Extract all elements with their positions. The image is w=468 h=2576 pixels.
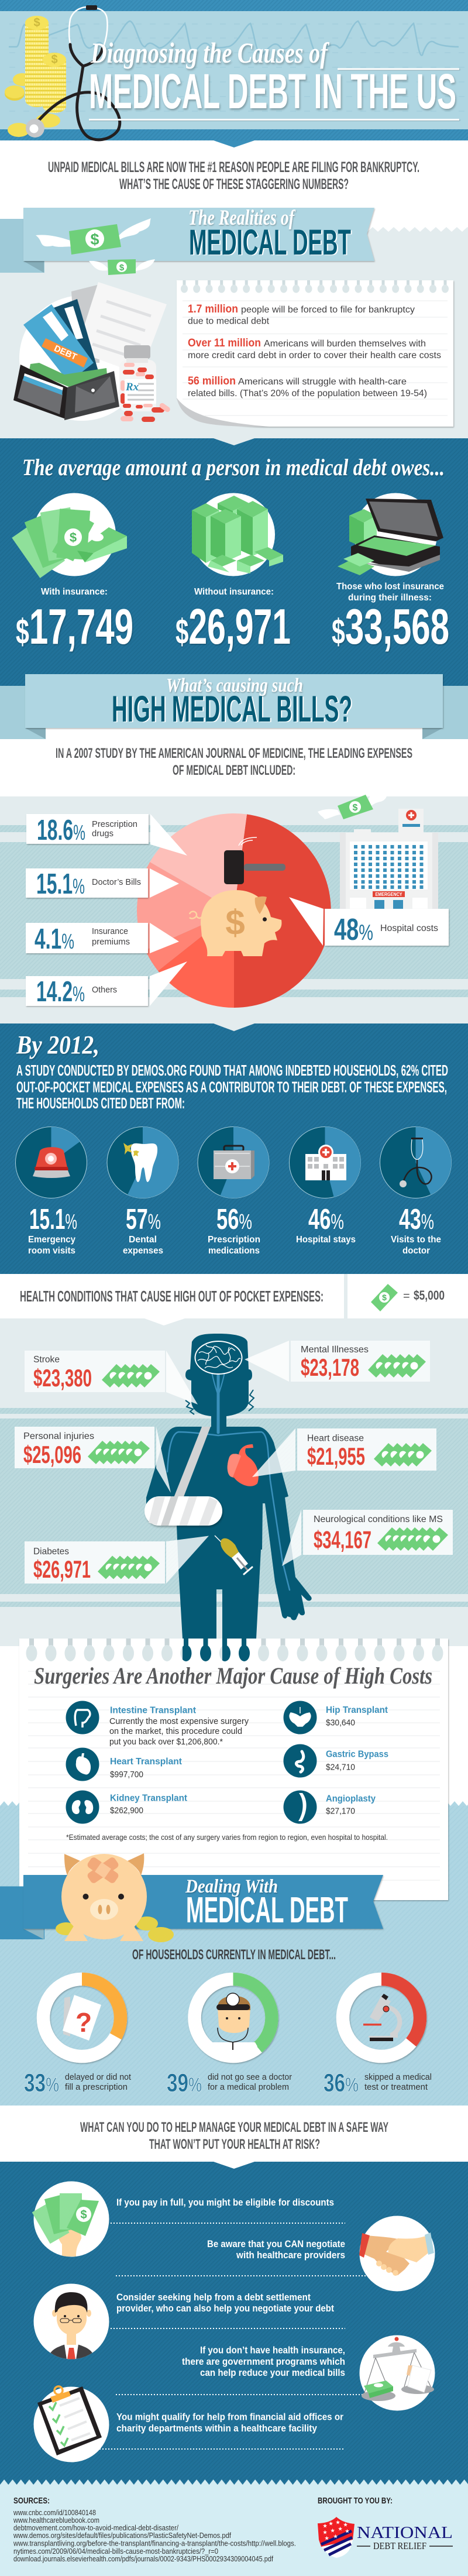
ribbon: dealing with medical debt: MEDICAL DEBT: [186, 1890, 348, 1931]
card: hospital costs: Hospital costs: [380, 923, 438, 933]
logo: national debt relief: [318, 2517, 453, 2558]
callout: diabetes: [25, 1536, 209, 1584]
tip icon: cash in hand: $: [80, 2209, 87, 2221]
ribbon: realities heading: MEDICAL DEBT: [190, 223, 352, 263]
donut: delayed prescription 33%: [24, 1979, 132, 2097]
surgery: angioplasty: [283, 1791, 376, 1823]
panel: tips: [0, 2162, 468, 2485]
donut: skipped doctor 39%: for a medical problem: [208, 2082, 289, 2092]
arm sling and cast: [144, 1427, 222, 1526]
study paragraph: THE HOUSEHOLDS CITED DEBT FROM:: [16, 1094, 185, 1112]
loose pills: [121, 402, 171, 422]
surgery: intestine transplant: put you back over $1,206,800.*: [109, 1737, 223, 1747]
donut values: 15.1%: [29, 1204, 77, 1235]
logo: national debt relief: ★: [343, 2522, 348, 2527]
callout: diabetes: $26,971: [33, 1555, 91, 1583]
panel: leading expenses background: [0, 796, 468, 1023]
card: others: 14.2%: [36, 976, 85, 1008]
tip icon: clipboard: [34, 2386, 109, 2462]
blood vessels: [167, 1372, 290, 1590]
without insurance: [192, 493, 283, 576]
logo: national debt relief: ★: [325, 2536, 329, 2541]
callout: heart disease: Heart disease: [307, 1434, 364, 1443]
ribbon: dealing with medical debt: [0, 1853, 383, 1942]
donut labels: expenses: [123, 1246, 163, 1256]
tip text: charity departments within a healthcare facility: [116, 2423, 318, 2434]
coin stacks: [5, 16, 66, 137]
ribbon: realities heading: MEDICAL DEBT: [189, 222, 351, 262]
card: others: Others: [92, 985, 117, 995]
lost insurance briefcase: [338, 493, 443, 576]
surgery: intestine transplant: [66, 1701, 249, 1747]
donut: delayed prescription 33%: ?: [75, 2007, 92, 2038]
ribbon: realities heading: [0, 206, 374, 275]
heading band: health conditions: $5,000: [414, 1288, 445, 1303]
fact: health-care bills: related bills. (That’s 20% of the population between 19-54): [188, 389, 427, 399]
money chain: [88, 1441, 150, 1464]
panel: average debt owed: With insurance:: [41, 587, 108, 597]
tip text: If you don’t have health insurance,: [200, 2345, 345, 2356]
with insurance: $: [70, 530, 77, 545]
donut: skipped test 36%: [324, 1979, 432, 2097]
callout: neurological conditions: $34,167: [314, 1526, 371, 1553]
donut: emergency room visits: [15, 1127, 87, 1198]
footnote: *Estimated average costs; the cost of any surgery varies from region to region, even hospital to hospital.: [66, 1833, 388, 1842]
stress marks: [185, 1390, 254, 1414]
surgery: angioplasty: $27,170: [326, 1806, 355, 1816]
illustration: wallet with debt cards and pills: [13, 282, 171, 422]
intro text: [48, 159, 419, 193]
ribbon: dealing with medical debt: Dealing With: [185, 1876, 278, 1897]
card: others: [26, 961, 187, 1008]
donut values: [29, 1204, 434, 1235]
surgery: gastric bypass: $24,710: [326, 1763, 355, 1772]
surgery: kidney transplant: $262,900: [110, 1806, 143, 1815]
tip text: [182, 2345, 345, 2378]
tip icon: handshake: [359, 2216, 435, 2292]
card: insurance premiums: 4.1%: [35, 923, 74, 955]
sources list: www.cnbc.com/id/100840148: [13, 2509, 96, 2517]
fact: credit card debt: [188, 337, 441, 360]
flying money small: $: [119, 263, 125, 273]
pill bottle: [119, 345, 156, 411]
fact: bankruptcy: due to medical debt: [188, 316, 270, 327]
surgery: intestine transplant: Currently the most expensive surgery: [109, 1717, 249, 1726]
callout: heart disease: $21,955: [307, 1442, 365, 1470]
fact: bankruptcy: 1.7 million: [188, 303, 238, 315]
panel: average debt owed: during their illness:: [348, 593, 432, 603]
flying money large: [36, 218, 151, 255]
callout: stroke: Stroke: [33, 1355, 60, 1365]
coin stacks: $: [51, 53, 58, 66]
donut labels: Prescription: [208, 1235, 260, 1245]
fact: credit card debt: more credit card debt in order to cover their health care costs: [188, 351, 441, 360]
panel: average debt owed: [0, 438, 468, 686]
study intro text: [56, 746, 412, 778]
money chain: [98, 1555, 160, 1579]
card: prescription drugs: 18.6%: [37, 815, 85, 846]
pill bottle: Rx: [125, 381, 139, 393]
surgery: intestine transplant: on the market, this procedure could: [109, 1727, 242, 1736]
card: prescription drugs: drugs: [92, 829, 113, 839]
donut values: 57%: [126, 1204, 161, 1235]
callout: mental illnesses: [245, 1341, 430, 1382]
logo: national debt relief: ★: [336, 2520, 340, 2525]
legend: money icon: $: [382, 1293, 387, 1302]
logo: national debt relief: NATIONAL: [357, 2524, 453, 2542]
fact: health-care bills: 56 million: [188, 375, 236, 387]
card: hospital costs: [289, 897, 449, 947]
donut values: 56%: [216, 1204, 252, 1235]
donut: visits to the doctor: [380, 1127, 452, 1198]
surgery: hip transplant: $30,640: [326, 1718, 355, 1727]
tip text: [116, 2292, 334, 2314]
sources list: [13, 2496, 296, 2563]
donut: delayed prescription 33%: delayed or did not: [65, 2072, 132, 2082]
tip text: with healthcare providers: [236, 2250, 345, 2261]
footer background: [0, 2479, 468, 2576]
piggy with bandage and coins: [56, 1853, 174, 1942]
sources list: download.journals.elsevierhealth.com/pdfs/journals/0002-9343/PHS0002934309004045.pdf: [13, 2555, 273, 2563]
heading band: health conditions: [0, 1274, 468, 1325]
brain: [195, 1341, 242, 1374]
ribbon: realities heading: The Realities of: [188, 206, 296, 230]
card: prescription drugs: [26, 814, 187, 856]
donut values: 46%: [308, 1204, 344, 1235]
tip text: [207, 2239, 345, 2261]
card: insurance premiums: Insurance: [92, 926, 128, 936]
donut: delayed prescription 33%: fill a prescription: [65, 2082, 128, 2092]
card: doctor's bills: Doctor’s Bills: [92, 877, 141, 887]
callout: mental illnesses: $23,178: [301, 1354, 359, 1381]
fact: bankruptcy: [188, 303, 415, 327]
illustration: wallet with debt cards and pills: DEBT: [53, 344, 78, 362]
card: hospital costs: 48%: [334, 913, 373, 947]
tip text: there are government programs which: [182, 2357, 345, 2367]
heading band: health conditions: =: [403, 1290, 410, 1303]
panel: by 2012 study: [0, 1023, 468, 1274]
tip text: Consider seeking help from a debt settlement: [116, 2292, 311, 2303]
panel: average debt owed: $26,971: [176, 599, 291, 655]
donut: skipped doctor 39%: did not go see a doctor: [208, 2072, 292, 2082]
panel: notepaper facts: [177, 280, 453, 427]
money chain: [377, 1527, 448, 1551]
syringe: [215, 1536, 252, 1574]
donut labels: doctor: [402, 1246, 430, 1256]
donut: skipped test 36%: test or treatment: [364, 2082, 428, 2092]
card: insurance premiums: premiums: [92, 937, 130, 947]
heading: what can you do: [80, 2120, 388, 2152]
bandage: [86, 1856, 120, 1884]
donut labels: Dental: [129, 1235, 157, 1245]
flying money: expenses: [318, 787, 388, 819]
donut labels: Hospital stays: [296, 1235, 356, 1245]
donut labels: [28, 1235, 441, 1256]
legs through paper holes: [183, 1639, 250, 1661]
money chain: [374, 1443, 432, 1466]
fact: health-care bills: Americans will struggle with health-care: [238, 377, 407, 387]
tip text: Be aware that you CAN negotiate: [207, 2239, 345, 2249]
surgery: kidney transplant: [66, 1791, 188, 1823]
study paragraph: [16, 1062, 448, 1112]
tip icon: scales: [359, 2335, 435, 2411]
donut labels: room visits: [28, 1246, 75, 1256]
logo: national debt relief: DEBT RELIEF: [373, 2540, 426, 2551]
sources list: debtmovement.com/how-to-avoid-medical-debt-disaster/: [13, 2524, 178, 2532]
panel: by 2012 study: By 2012,: [16, 1031, 99, 1059]
donut: skipped doctor 39%: [167, 1979, 292, 2097]
donut: hospital stays: [289, 1126, 361, 1198]
sources list: SOURCES:: [13, 2496, 50, 2506]
sources list: www.transplantliving.org/before-the-transplant/financing-a-transplant/the-costs/http://well.blogs.: [13, 2540, 296, 2548]
logo: national debt relief: ★: [333, 2534, 338, 2539]
panel: average debt owed: Those who lost insurance: [336, 582, 444, 592]
callout: neurological conditions: Neurological conditions like MS: [314, 1514, 443, 1524]
tip text: provider, who can also help you negotiate your debt: [116, 2303, 334, 2314]
donut labels: Visits to the: [391, 1235, 441, 1245]
panel: surgeries notepaper: [19, 1639, 448, 1900]
pie chart: expenses: [137, 813, 331, 1008]
ribbon: high medical bills heading: [0, 674, 468, 739]
donut labels: Emergency: [28, 1235, 75, 1245]
flying money large: $: [90, 231, 99, 248]
logo: national debt relief: ★: [329, 2521, 333, 2526]
tip text: can help reduce your medical bills: [200, 2368, 345, 2378]
money chain: [368, 1354, 426, 1378]
card: prescription drugs: Prescription: [92, 819, 137, 829]
callout: neurological conditions: [282, 1510, 453, 1566]
flying money small: [89, 259, 155, 275]
logo: national debt relief: ★: [338, 2526, 343, 2532]
brought to you by: BROUGHT TO YOU BY:: [318, 2496, 393, 2506]
header banner: [0, 0, 468, 147]
surgery: hip transplant: Hip Transplant: [326, 1705, 388, 1715]
callout: personal injuries: $25,096: [23, 1441, 81, 1468]
fact: credit card debt: Americans will burden themselves with: [264, 339, 426, 349]
tip icon: settlement provider: [34, 2283, 109, 2359]
tip icon: cash in hand: [32, 2182, 109, 2256]
callout: heart disease: [252, 1428, 436, 1477]
logo: national debt relief: ★: [323, 2530, 328, 2535]
surgery: heart transplant: $997,700: [110, 1770, 143, 1780]
card: doctor's bills: 15.1%: [36, 868, 85, 900]
heading: what can you do: THAT WON’T PUT YOUR HEALTH AT RISK?: [149, 2137, 320, 2152]
card: doctor's bills: [26, 868, 179, 900]
sources list: nytimes.com/2009/06/04/medical-bills-cause-most-bankruptcies/?_r=0: [13, 2547, 218, 2556]
surgery: kidney transplant: Kidney Transplant: [110, 1793, 188, 1804]
panel: health conditions background: [0, 1318, 468, 1646]
coin stacks: $: [33, 16, 40, 29]
panel: realities background: [0, 227, 468, 438]
hammer: [224, 837, 285, 884]
panel: average debt owed: $17,749: [16, 599, 133, 655]
surgery: angioplasty: Angioplasty: [326, 1794, 376, 1804]
surgery: heart transplant: Heart Transplant: [110, 1757, 183, 1767]
heart: [228, 1444, 259, 1486]
logo: national debt relief: ★: [331, 2528, 335, 2533]
piggy bank: $: [225, 903, 245, 942]
title: [89, 36, 459, 121]
sources list: www.demos.org/sites/default/files/publications/PlasticSafetyNet-Demos.pdf: [13, 2532, 231, 2540]
callout: diabetes: Diabetes: [33, 1547, 69, 1557]
title: Diagnosing the Causes of: [90, 36, 329, 69]
sources list: www.healthcarebluebook.com: [13, 2516, 99, 2525]
ECG line: [9, 21, 459, 56]
legend: money icon: [371, 1284, 398, 1311]
card: insurance premiums: [26, 923, 179, 955]
study intro text: OF MEDICAL DEBT INCLUDED:: [173, 763, 295, 778]
panel: average debt owed: Without insurance:: [194, 587, 274, 597]
callout: personal injuries: Personal injuries: [23, 1431, 94, 1441]
donut: skipped doctor 39%: 39%: [167, 2069, 202, 2097]
piggy bank: [190, 890, 281, 956]
icon: hospital building: [340, 809, 438, 911]
stethoscope: [26, 5, 120, 140]
donut values: 43%: [399, 1204, 434, 1235]
body figure: [144, 1334, 312, 1639]
money chain: [102, 1364, 160, 1387]
logo: national debt relief: ★: [345, 2529, 350, 2534]
donut labels: medications: [208, 1246, 260, 1256]
flying money: expenses: $: [353, 803, 358, 813]
donut: delayed prescription 33%: 33%: [24, 2069, 59, 2097]
callout: personal injuries: [15, 1427, 171, 1493]
with insurance: [12, 493, 127, 578]
icon: hospital building: EMERGENCY: [376, 892, 402, 897]
callout: stroke: $23,380: [33, 1364, 92, 1392]
surgery: intestine transplant: Intestine Transplant: [110, 1705, 197, 1716]
donut: dental expenses: [107, 1127, 178, 1198]
tip text: [116, 2412, 344, 2434]
tip text: You might qualify for help from financial aid offices or: [116, 2412, 344, 2423]
callout: mental illnesses: Mental Illnesses: [301, 1345, 369, 1355]
surgery: gastric bypass: [283, 1744, 388, 1778]
donut: prescription medications: [198, 1127, 269, 1198]
donut: skipped test 36%: skipped a medical: [364, 2072, 432, 2082]
surgery: hip transplant: [283, 1701, 388, 1734]
surgery: gastric bypass: Gastric Bypass: [326, 1750, 388, 1759]
fact: health-care bills: [188, 375, 427, 399]
ribbon: high medical bills heading: What’s causing such: [166, 675, 303, 696]
sky background: dealing section: [0, 1801, 468, 2106]
logo: national debt relief: ★: [323, 2523, 328, 2529]
fact: credit card debt: Over 11 million: [188, 337, 261, 349]
donut: skipped test 36%: 36%: [324, 2069, 359, 2097]
surgery: heart transplant: [66, 1747, 183, 1781]
fact: bankruptcy: people will be forced to file for bankruptcy: [241, 305, 415, 315]
callout: stroke: [25, 1351, 198, 1404]
tip text: If you pay in full, you might be eligible for discounts: [116, 2197, 334, 2208]
